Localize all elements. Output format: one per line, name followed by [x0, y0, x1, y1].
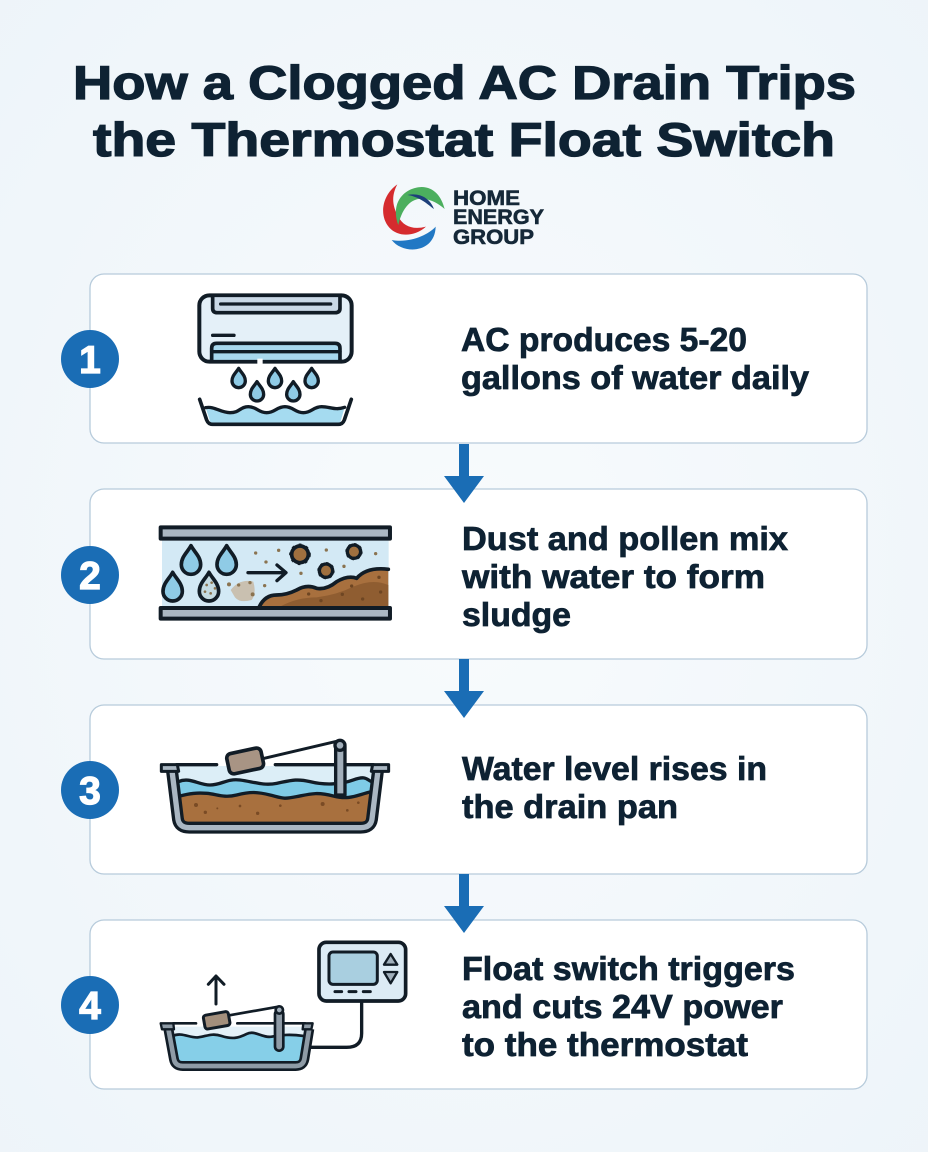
- step 1 text: gallons of water daily: [461, 359, 810, 396]
- step 1 text: AC produces 5-20: [461, 321, 747, 358]
- step number 3: 3: [79, 770, 101, 813]
- step number 4: 4: [79, 985, 101, 1028]
- icon: float switch wired to thermostat: [161, 942, 406, 1066]
- icon: air conditioner dripping into a basin: [199, 295, 352, 424]
- step number 4: [61, 976, 119, 1034]
- step number 3: [61, 761, 119, 819]
- panel: step 4: [61, 920, 867, 1089]
- logo: Home Energy Group: GROUP: [453, 226, 534, 249]
- step 2 text: Dust and pollen mix: [462, 520, 789, 557]
- logo: Home Energy Group: HOME: [453, 187, 520, 210]
- step number 1: [61, 330, 119, 388]
- step 4 text: and cuts 24V power: [462, 988, 783, 1025]
- step 3 text: Water level rises in: [462, 750, 767, 787]
- step 3 text: the drain pan: [462, 788, 678, 825]
- step 4 text: to the thermostat: [462, 1026, 748, 1063]
- icon: drain pan with sludge, rising water and float: [161, 740, 389, 828]
- step 4 text: [462, 950, 795, 1063]
- arrow: step 3 to step 4: [444, 874, 484, 933]
- step 2 text: [461, 520, 789, 633]
- step 3 text: [462, 750, 767, 825]
- title: [73, 56, 856, 166]
- logo: Home Energy Group: [383, 184, 544, 249]
- logo: Home Energy Group: ENERGY: [453, 206, 544, 229]
- step 1 text: [461, 321, 810, 396]
- step 4 text: Float switch triggers: [462, 950, 795, 987]
- icon: water and dust forming sludge in a pipe: [161, 527, 390, 619]
- arrow: step 1 to step 2: [444, 444, 484, 503]
- title: the Thermostat Float Switch: [93, 113, 835, 166]
- title: How a Clogged AC Drain Trips: [73, 56, 856, 109]
- panel: step 1: [61, 274, 867, 443]
- step 2 text: sludge: [462, 596, 571, 633]
- panel: step 2: [61, 489, 867, 659]
- step 2 text: with water to form: [461, 558, 765, 595]
- arrow: step 2 to step 3: [444, 659, 484, 718]
- step number 1: 1: [79, 339, 101, 382]
- step number 2: [61, 546, 119, 604]
- panel: step 3: [61, 705, 867, 874]
- step number 2: 2: [79, 555, 101, 598]
